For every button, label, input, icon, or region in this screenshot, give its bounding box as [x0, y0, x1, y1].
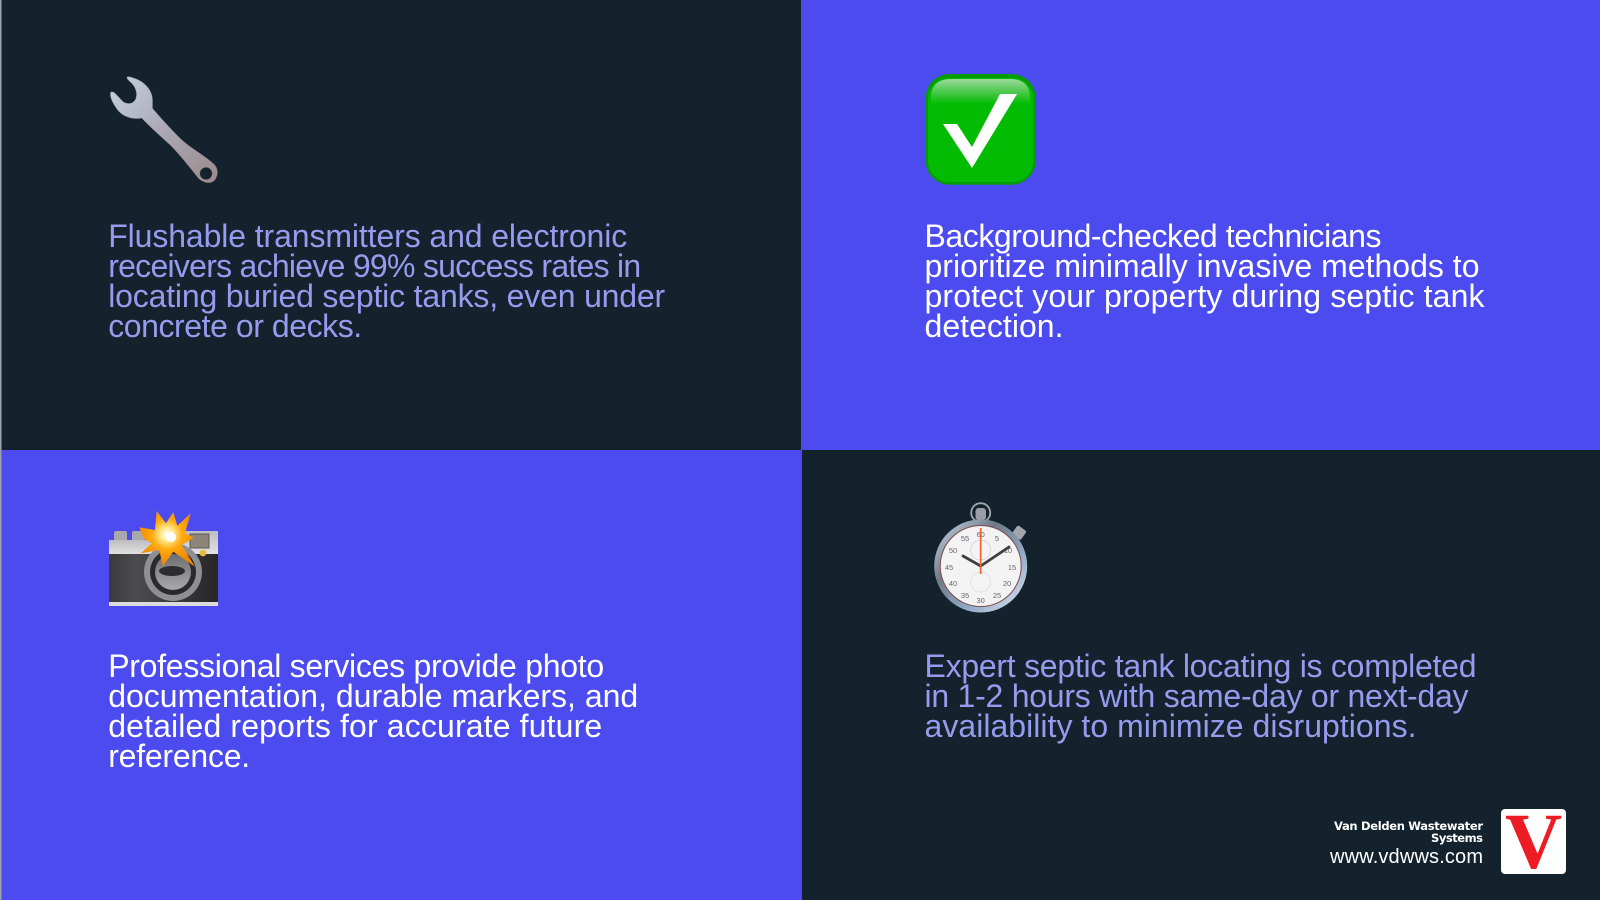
text: flushable transmitters copy [108, 218, 666, 344]
icon: camera with flash [109, 511, 218, 606]
text: flushable transmitters copy: concrete or decks. [108, 308, 362, 344]
panel: locating time [802, 450, 1600, 900]
icon: wrench [110, 77, 218, 183]
text: photo documentation copy [108, 648, 638, 774]
company name [1334, 819, 1483, 845]
text: background-checked copy: Background-checked technicians [924, 218, 1382, 254]
panel: photo documentation [0, 450, 802, 900]
text: flushable transmitters copy: locating buried septic tanks, even under [108, 278, 666, 314]
icon: green check mark [926, 74, 1036, 185]
icon: stopwatch: 25 [993, 591, 1001, 600]
panel: flushable transmitters [0, 0, 801, 450]
panel: background-checked technicians [801, 0, 1600, 450]
icon: stopwatch: 10 [1004, 546, 1012, 555]
footer: company brand [1329, 799, 1566, 886]
text: locating time copy: Expert septic tank locating is completed [924, 648, 1476, 684]
text: background-checked copy: detection. [924, 308, 1064, 344]
text: locating time copy [924, 648, 1476, 744]
text: photo documentation copy: reference. [108, 738, 250, 774]
icon: stopwatch: 55 [961, 534, 969, 543]
icon: stopwatch: 40 [949, 579, 957, 588]
icon: stopwatch: 30 [977, 596, 985, 605]
icon: stopwatch: 35 [961, 591, 969, 600]
icon: stopwatch: 45 [945, 563, 953, 572]
text: photo documentation copy: Professional services provide photo [108, 648, 604, 684]
icon: stopwatch: 50 [949, 546, 957, 555]
text: background-checked copy: protect your property during septic tank [924, 278, 1486, 314]
icon: stopwatch: 15 [1008, 563, 1016, 572]
logo: V [1505, 799, 1562, 886]
company name: Systems [1431, 831, 1483, 845]
text: flushable transmitters copy: Flushable transmitters and electronic [108, 218, 627, 254]
icon: stopwatch [934, 503, 1027, 612]
text: background-checked copy [924, 218, 1486, 344]
icon: stopwatch: 5 [995, 534, 999, 543]
text: photo documentation copy: detailed reports for accurate future [108, 708, 602, 744]
text: photo documentation copy: documentation, durable markers, and [108, 678, 638, 714]
website: www.vdwws.com [1329, 846, 1483, 868]
icon: stopwatch: 60 [977, 530, 985, 539]
company name: Van Delden Wastewater [1334, 819, 1483, 833]
icon: stopwatch: 20 [1003, 579, 1011, 588]
text: background-checked copy: prioritize minimally invasive methods to [924, 248, 1480, 284]
text: flushable transmitters copy: receivers achieve 99% success rates in [108, 248, 641, 284]
text: locating time copy: availability to minimize disruptions. [924, 708, 1416, 744]
text: locating time copy: in 1-2 hours with same-day or next-day [924, 678, 1468, 714]
